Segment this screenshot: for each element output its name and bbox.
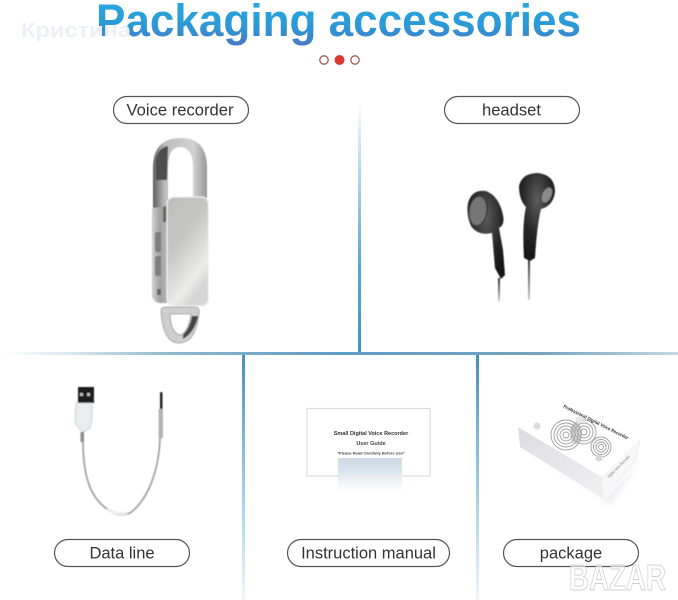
watermark: Кристина: Кристина — [21, 20, 132, 42]
icon: instruction manual: User Guide — [356, 441, 386, 447]
label: Data line: Data line — [89, 544, 155, 562]
icon: instruction manual: Small Digital Voice Recorder — [334, 431, 409, 437]
label: Instruction manual — [288, 540, 450, 566]
page indicator dots — [320, 55, 359, 65]
icon: package box — [518, 403, 640, 505]
label: package — [504, 540, 638, 566]
label: headset — [444, 96, 580, 124]
label: Instruction manual: Instruction manual — [301, 544, 436, 562]
label: headset: headset — [482, 100, 541, 120]
icon: package box: Digital Voice Recorder — [607, 454, 631, 479]
icon: voice recorder — [152, 138, 208, 343]
label: Data line — [54, 540, 190, 566]
icon: instruction manual: *Please Read Carefully Before Use* — [337, 450, 405, 456]
icon: package box: Professional Digital Voice Recorder — [562, 404, 629, 441]
label: Voice recorder — [114, 96, 248, 124]
label: Voice recorder: Voice recorder — [126, 100, 234, 120]
icon: USB data line — [75, 387, 163, 515]
icon: instruction manual — [307, 408, 430, 491]
label: package: package — [540, 544, 602, 562]
icon: earphones — [467, 173, 555, 301]
